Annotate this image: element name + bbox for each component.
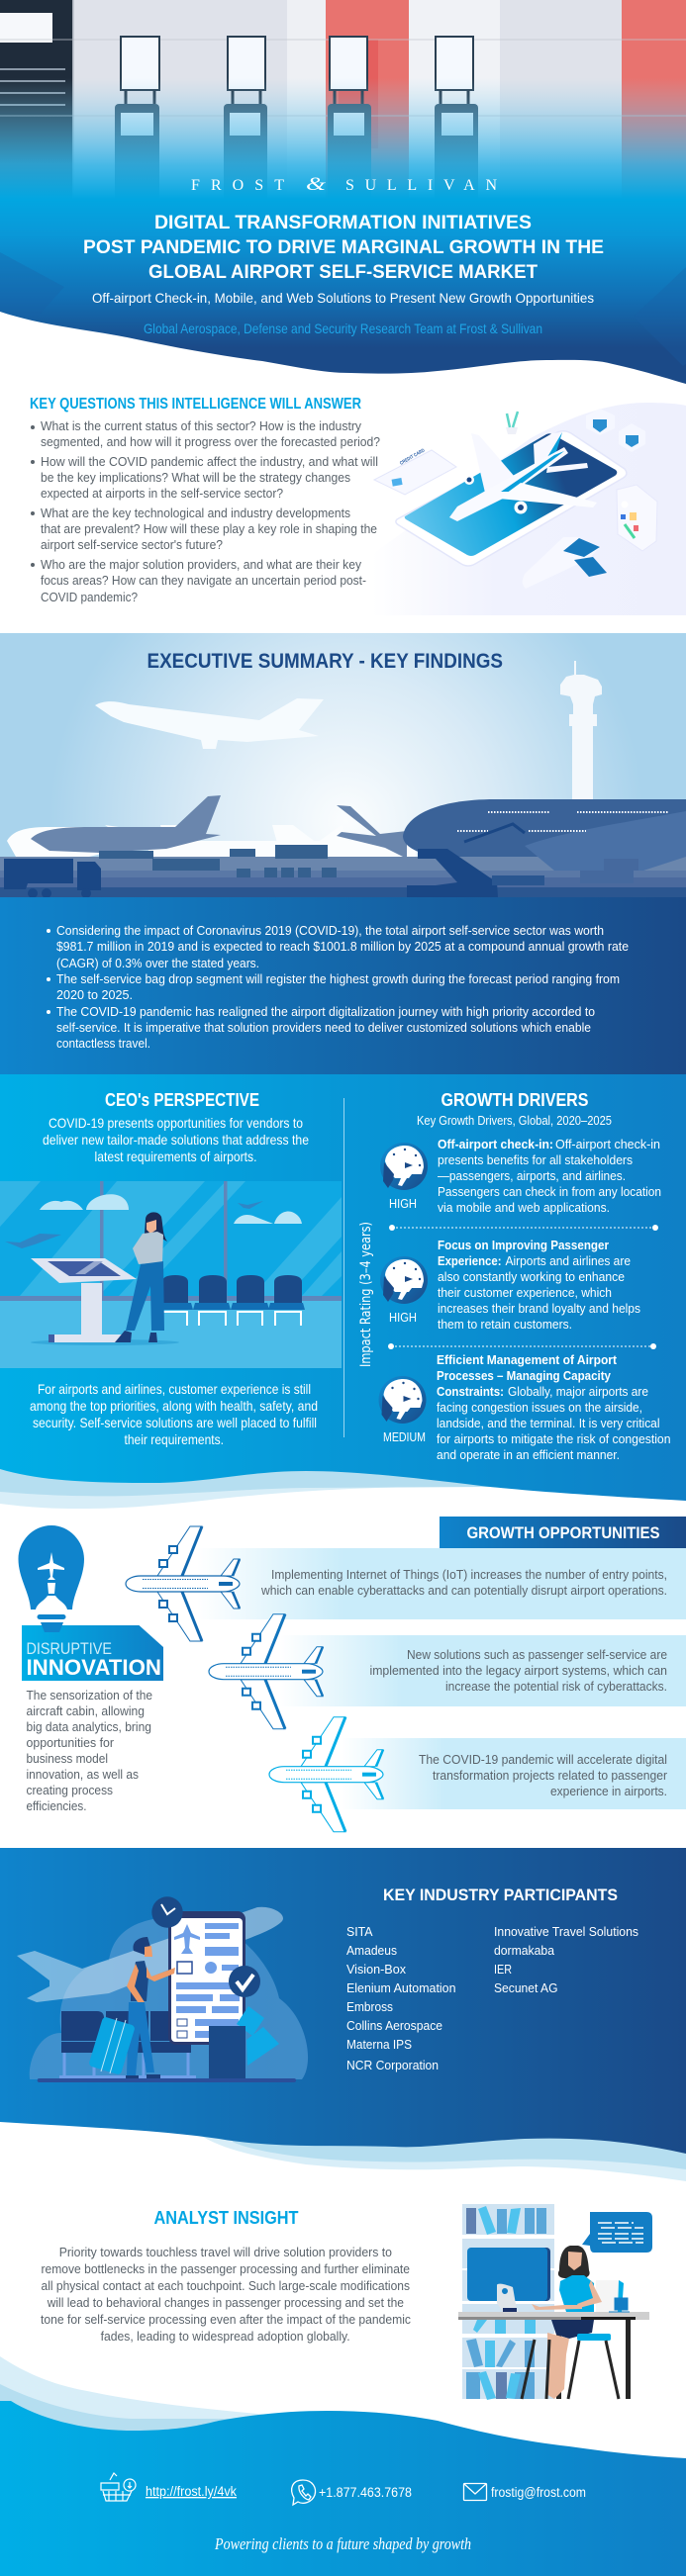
participants column 1: Collins Aerospace	[346, 2018, 442, 2033]
opportunity band 3: transformation projects related to passenger	[433, 1768, 668, 1783]
driver 2 text: Experience:	[438, 1253, 501, 1268]
label: disruptive innovation: DISRUPTIVE	[26, 1639, 112, 1658]
baggage carts	[99, 845, 337, 877]
key findings list	[47, 923, 629, 1051]
key findings list: self-service. It is imperative that solution providers need to deliver customized solutions which enable	[56, 1020, 591, 1035]
insight paragraph: Priority towards touchless travel will drive solution providers to	[59, 2245, 392, 2259]
heading bar	[440, 1517, 686, 1548]
icon: basket	[101, 2473, 136, 2501]
CEO closing text: their requirements.	[125, 1431, 224, 1447]
white plane in flight	[95, 698, 324, 749]
CEO closing text	[30, 1381, 318, 1447]
participants column 1: Vision-Box	[346, 1962, 406, 1977]
driver 1 text: via mobile and web applications.	[438, 1200, 610, 1215]
CEO closing text: For airports and airlines, customer experience is still	[38, 1381, 311, 1397]
dotted separator 1	[389, 1225, 658, 1231]
ground vehicles	[4, 849, 638, 898]
distant white aircraft	[7, 825, 416, 857]
driver 3 text: Globally, major airports are	[508, 1384, 648, 1399]
heading: KEY QUESTIONS THIS INTELLIGENCE WILL ANSWER	[30, 396, 361, 413]
seats	[156, 1275, 305, 1326]
disruptive innovation text: creating process	[26, 1783, 113, 1797]
CEO intro text: latest requirements of airports.	[95, 1149, 257, 1164]
panel: footer	[0, 2401, 686, 2576]
disruptive innovation text: The sensorization of the	[26, 1688, 152, 1702]
disruptive innovation text: opportunities for	[26, 1735, 115, 1750]
icon: mail	[463, 2483, 487, 2501]
CEO intro text	[43, 1115, 309, 1164]
opportunity band 3	[342, 1738, 686, 1809]
gauge: high	[380, 1143, 428, 1211]
question list: What are the key technological and industry developments	[41, 506, 350, 520]
participants column 1: SITA	[346, 1924, 373, 1939]
opportunity band 3: The COVID-19 pandemic will accelerate digital	[419, 1752, 667, 1767]
CEO intro text: deliver new tailor-made solutions that address the	[43, 1132, 309, 1148]
dotted separator 2	[388, 1343, 656, 1349]
logo: Frost & Sullivan: &	[306, 174, 326, 195]
opportunity band 2	[280, 1635, 686, 1706]
gauge: medium	[378, 1376, 426, 1444]
icon: plane 1	[126, 1526, 240, 1641]
driver 1 text: Off-airport check-in:	[438, 1137, 553, 1151]
panel: analyst insight	[41, 2204, 652, 2400]
insight paragraph: remove bottlenecks in the passenger processing and further eliminate	[42, 2261, 410, 2276]
participants column 1: Elenium Automation	[346, 1980, 455, 1995]
title: DIGITAL TRANSFORMATION INITIATIVES	[154, 213, 532, 233]
opportunity band 1	[197, 1548, 686, 1619]
key findings list: The COVID-19 pandemic has realigned the airport digitalization journey with high priority accorded to	[56, 1004, 595, 1019]
question list: Who are the major solution providers, and what are their key	[41, 557, 361, 572]
driver 3 text: and operate in an efficient manner.	[437, 1447, 620, 1462]
driver 3 text: Constraints:	[437, 1384, 504, 1399]
growth drivers heading: GROWTH DRIVERS	[441, 1090, 588, 1110]
panel: growth opportunities	[18, 1517, 686, 1832]
key findings list: The self-service bag drop segment will register the highest growth during the forecast period ranging from	[56, 971, 620, 986]
illustration: traveller with phone	[17, 1896, 308, 2082]
driver 1 text: —passengers, airports, and airlines.	[438, 1168, 626, 1183]
CEO closing text: security. Self-service solutions are well placed to fulfill	[33, 1415, 317, 1430]
question list	[31, 418, 380, 604]
link: http://frost.ly/4vk	[146, 2484, 237, 2499]
opportunity band 1: Implementing Internet of Things (IoT) increases the number of entry points,	[271, 1567, 667, 1582]
growth drivers subheading: Key Growth Drivers, Global, 2020–2025	[417, 1114, 612, 1128]
logo: Frost & Sullivan: SULLIVAN	[345, 177, 497, 194]
subtitle: Off-airport Check-in, Mobile, and Web Solutions to Present New Growth Opportunities	[92, 290, 594, 306]
CEO closing text: among the top priorities, along with health, safety, and	[30, 1398, 318, 1414]
gauge: high: HIGH	[389, 1197, 417, 1211]
panel: key industry participants	[0, 1848, 686, 2154]
driver 2 text: Focus on Improving Passenger	[438, 1238, 609, 1252]
participants column 2	[494, 1924, 638, 1995]
opportunity band 2: New solutions such as passenger self-service are	[407, 1647, 667, 1662]
gauge: high: HIGH	[389, 1311, 417, 1325]
decorative light wave	[0, 1464, 495, 1509]
question list: focus areas? How can they navigate an uncertain period post-	[41, 573, 366, 588]
logo: Frost & Sullivan: FROST	[191, 177, 284, 194]
panel: executive summary illustration	[0, 633, 686, 898]
illustration: phone with plane	[372, 403, 686, 615]
heading bar: GROWTH OPPORTUNITIES	[467, 1523, 659, 1542]
logo: Frost & Sullivan	[191, 174, 497, 195]
driver 3 text: Processes – Managing Capacity	[437, 1368, 612, 1383]
CEO intro text: COVID-19 presents opportunities for vendors to	[49, 1115, 303, 1131]
icon: plane 3	[269, 1717, 383, 1832]
heading: ANALYST INSIGHT	[154, 2208, 299, 2228]
driver 1 text: Passengers can check in from any location	[438, 1184, 661, 1199]
driver 1 text	[438, 1137, 661, 1215]
driver 2 text: Airports and airlines are	[505, 1253, 631, 1268]
insight paragraph: all physical contact at each touchpoint. Such large-scale modifications	[42, 2278, 410, 2293]
label: disruptive innovation	[22, 1622, 163, 1681]
opportunity band 1: which can enable cyberattacks and can potentially disrupt airport operations.	[260, 1583, 667, 1598]
phone number: +1.877.463.7678	[319, 2485, 412, 2500]
question list: be the key implications? What will be the strategy changes	[41, 470, 350, 485]
illustration: analyst at desk	[458, 2204, 652, 2400]
CEO heading: CEO's PERSPECTIVE	[105, 1090, 259, 1110]
email: frostig@frost.com	[491, 2485, 586, 2500]
opportunity band 2: implemented into the legacy airport systems, which can	[370, 1663, 667, 1678]
participants column 1	[346, 1924, 455, 2072]
driver 2 text: their customer experience, which	[438, 1285, 612, 1300]
question list: How will the COVID pandemic affect the industry, and what will	[41, 454, 378, 469]
gauge: high	[380, 1256, 428, 1325]
icon: light bulb with plane	[18, 1525, 84, 1619]
heading: KEY INDUSTRY PARTICIPANTS	[383, 1886, 618, 1904]
illustration: woman at kiosk	[0, 1181, 342, 1368]
panel: executive summary text	[0, 897, 686, 1074]
disruptive innovation text	[26, 1688, 152, 1813]
illustration: phone with plane: CREDIT CARD	[399, 447, 427, 467]
driver 1 text: presents benefits for all stakeholders	[438, 1152, 633, 1167]
participants column 2: Secunet AG	[494, 1980, 558, 1995]
key findings list: (CAGR) of 0.3% over the stated years.	[56, 956, 259, 970]
participants column 2: IER	[494, 1962, 512, 1977]
participants column 1: NCR Corporation	[346, 2058, 439, 2072]
decorative light wave	[203, 2127, 686, 2181]
participants column 2: Innovative Travel Solutions	[494, 1924, 638, 1939]
disruptive innovation text: big data analytics, bring	[26, 1719, 151, 1734]
disruptive innovation text: aircraft cabin, allowing	[26, 1703, 145, 1718]
tagline: Powering clients to a future shaped by growth	[214, 2534, 471, 2553]
driver 2 text	[438, 1238, 640, 1332]
panel: key questions	[30, 396, 686, 615]
insight paragraph	[41, 2245, 411, 2344]
axis label: impact rating: Impact Rating (3–4 years)	[358, 1222, 374, 1367]
title: GLOBAL AIRPORT SELF-SERVICE MARKET	[148, 262, 538, 283]
question list: What is the current status of this sector? How is the industry	[41, 418, 361, 433]
participants column 1: Materna IPS	[346, 2037, 412, 2052]
driver 2 text: them to retain customers.	[438, 1317, 572, 1332]
question list: that are prevalent? How will these play a key role in shaping the	[41, 521, 377, 536]
driver 3 text: facing congestion issues on the airside,	[437, 1400, 642, 1415]
participants column 1: Amadeus	[346, 1943, 397, 1958]
ground bands	[0, 857, 686, 871]
key findings list: Considering the impact of Coronavirus 2019 (COVID-19), the total airport self-service sector was worth	[56, 923, 604, 938]
key findings list: contactless travel.	[56, 1036, 150, 1051]
insight paragraph: will lead to behavioral changes in passenger processing and set the	[47, 2295, 404, 2310]
large aircraft	[403, 799, 686, 871]
parked plane mid tail	[337, 805, 407, 859]
driver 2 text: increases their brand loyalty and helps	[438, 1301, 640, 1316]
driver 3 text: for airports to mitigate the risk of congestion	[437, 1431, 671, 1446]
hero header panel	[0, 0, 686, 391]
icon: plane 2	[209, 1614, 323, 1729]
question list: airport self-service sector's future?	[41, 537, 223, 552]
insight paragraph: tone for self-service processing even after the impact of the pandemic	[41, 2312, 411, 2327]
heading: EXECUTIVE SUMMARY - KEY FINDINGS	[147, 650, 503, 673]
driver 3 text: landside, and the terminal. It is very critical	[437, 1416, 660, 1430]
question list: segmented, and how will it progress over the forecasted period?	[41, 434, 380, 449]
key findings list: 2020 to 2025.	[56, 987, 133, 1002]
insight paragraph: fades, leading to widespread adoption globally.	[101, 2329, 350, 2344]
question list: expected at airports in the self-service sector?	[41, 486, 283, 501]
title	[83, 213, 604, 283]
participants column 1: Embross	[346, 1999, 393, 2014]
disruptive innovation text: business model	[26, 1751, 108, 1766]
panel: CEO perspective and growth drivers	[0, 1074, 686, 1501]
icon: phone	[292, 2480, 315, 2505]
decorative light wave	[0, 2356, 267, 2443]
disruptive innovation text: efficiencies.	[26, 1798, 87, 1813]
control tower	[560, 661, 602, 799]
driver 3 text	[437, 1352, 671, 1462]
label: disruptive innovation: INNOVATION	[26, 1655, 161, 1680]
parked plane left	[31, 795, 221, 853]
question list: COVID pandemic?	[41, 590, 138, 604]
opportunity band 2: increase the potential risk of cyberattacks.	[445, 1679, 667, 1694]
driver 2 text: also constantly working to enhance	[438, 1269, 625, 1284]
driver 3 text: Efficient Management of Airport	[437, 1352, 618, 1367]
research team line: Global Aerospace, Defense and Security Research Team at Frost & Sullivan	[144, 321, 542, 336]
driver 1 text: Off-airport check-in	[555, 1137, 660, 1151]
participants column 2: dormakaba	[494, 1943, 555, 1958]
hero photo: kiosks in terminal	[0, 0, 686, 237]
gauge: medium: MEDIUM	[383, 1430, 426, 1444]
key findings list: $981.7 million in 2019 and is expected to reach $1001.8 million by 2025 at a compound annual growth rate	[56, 939, 629, 954]
title: POST PANDEMIC TO DRIVE MARGINAL GROWTH IN THE	[83, 237, 604, 258]
disruptive innovation text: innovation, as well as	[26, 1767, 139, 1782]
opportunity band 3: experience in airports.	[550, 1784, 667, 1798]
woman	[115, 1212, 167, 1342]
